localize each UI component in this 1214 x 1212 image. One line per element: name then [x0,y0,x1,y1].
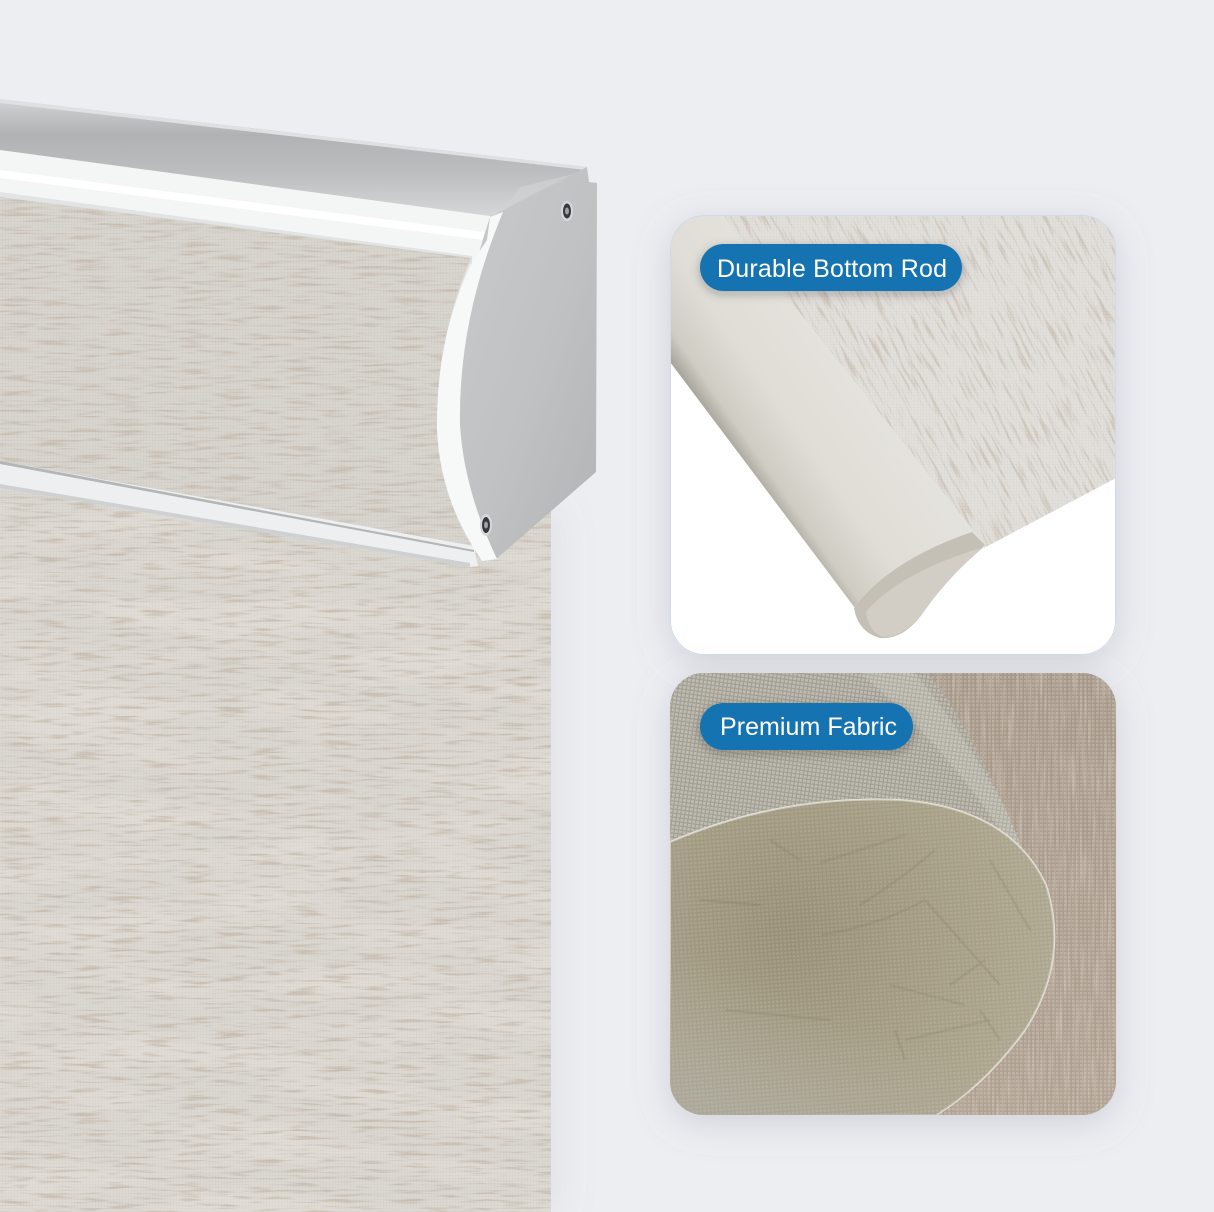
bottom white trim [0,461,478,567]
curled fabric outer face [670,673,1022,848]
panel: premium fabric [670,673,1116,1115]
bottom rod [670,215,985,612]
curled fabric inner face [670,795,1070,1115]
headrail white front strip [0,150,490,264]
rod fabric [723,215,1116,548]
headrail [0,99,597,567]
end cap plate [458,167,597,560]
hanging fabric [0,470,551,1212]
label: durable bottom rod [700,244,962,291]
label: durable bottom rod: Durable Bottom Rod [717,255,947,283]
screw bottom [480,514,492,536]
headrail fabric cover [0,197,474,552]
white end trim [437,212,503,561]
label: premium fabric: Premium Fabric [720,713,897,741]
screw top [561,201,573,221]
linen backdrop [670,673,1116,1115]
roller shade product [0,99,597,1212]
headrail top channel [0,99,587,217]
linen flecks [700,835,1030,1060]
panel: durable bottom rod [660,213,1126,672]
rod end cap [854,532,985,638]
label: premium fabric [700,703,913,750]
